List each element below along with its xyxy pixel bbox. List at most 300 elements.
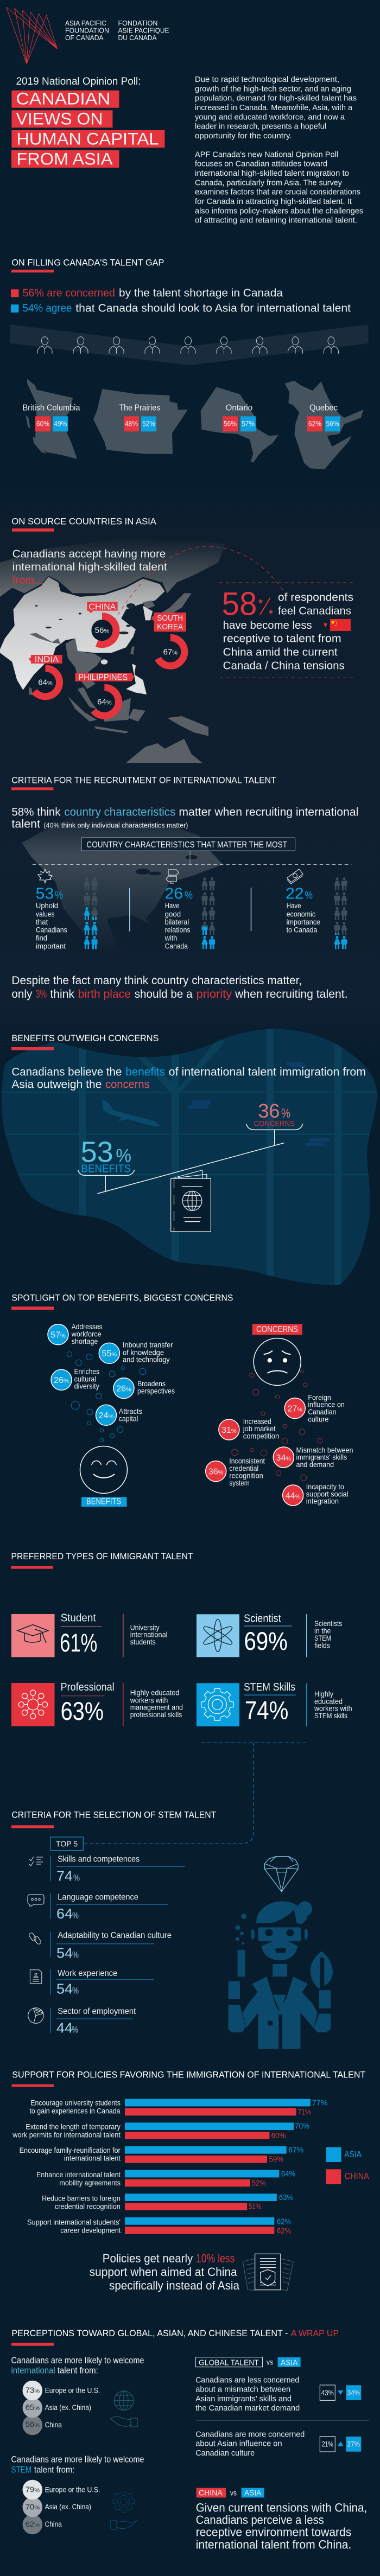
panel: welcoming international talent: talent from: (58, 2366, 98, 2376)
concern labels: support social (306, 1489, 349, 1498)
province percentage boxes: 60% (36, 419, 49, 428)
icon: graduation cap (17, 1624, 48, 1643)
policy labels: Extend the length of temporary (26, 2122, 121, 2131)
column: 53% uphold values: 53 (36, 885, 54, 903)
stacked circles (23, 2480, 42, 2534)
concern labels: job market (243, 1424, 276, 1433)
map: British Columbia (26, 379, 77, 459)
dashed connector from STEM skills to top 5 (84, 1743, 306, 1844)
policy labels: Reduce barriers to foreign (42, 2195, 121, 2203)
key stats: concerned and agree: 54% agree (23, 303, 72, 315)
column: 22% economic importance: importance (287, 918, 320, 926)
concern labels: Inconsistent (229, 1457, 265, 1465)
panel: welcoming STEM talent: STEM (11, 2465, 31, 2475)
blob background with airport window (0, 1025, 380, 1297)
policy labels: Encourage family-reunification for (20, 2146, 121, 2154)
benefit labels: diversity (74, 1382, 99, 1391)
tile: Scientist 69%: in the (314, 1627, 331, 1635)
row: adaptability to Canadian culture: % (72, 1949, 79, 1960)
tile: STEM Skills 74%: STEM skills (314, 1711, 347, 1720)
birth place statement: only (11, 988, 33, 1000)
logo: Asia Pacific Foundation: DU CANADA (118, 34, 157, 42)
comparison 21 to 27 percent: 21% (322, 2440, 333, 2448)
recruitment statement: talent (11, 818, 40, 830)
concerns tag: CONCERNS (256, 1325, 298, 1334)
panel: welcoming international talent: Canadians are more likely to welcome (11, 2356, 144, 2365)
benefit labels: cultural (74, 1374, 96, 1383)
panel: China vs Asia: Canadians perceive a less (196, 2513, 324, 2527)
heading: perceptions wrap up: PERCEPTIONS TOWARD GLOBAL, ASIAN, AND CHINESE TALENT - (11, 2328, 288, 2338)
column: 26% bilateral relations: 26 (165, 885, 183, 903)
comparison 21 to 27 percent: 27% (347, 2440, 360, 2448)
title block: HUMAN CAPITAL (16, 129, 159, 148)
policy labels: career development (60, 2226, 121, 2234)
53% benefits: BENEFITS (81, 1163, 131, 1175)
Canadians accept text: from... (12, 575, 43, 586)
stacked circles: 56% (26, 2420, 40, 2430)
key stats: concerned and agree (11, 288, 351, 315)
heading: support for policies (12, 2069, 365, 2087)
column: 53% uphold values: that (36, 918, 48, 926)
panel: global talent vs Asia: about a mismatch between (195, 2385, 290, 2394)
heading: criteria for recruitment (11, 775, 276, 790)
benefit labels: Inbound transfer (123, 1341, 173, 1349)
donut: Philippines 64%: 64% (97, 697, 112, 706)
icon: gear and hand (110, 2491, 137, 2529)
heading: perceptions wrap up (11, 2328, 339, 2346)
concern labels: immigrants' skills (296, 1453, 347, 1462)
policy labels: credential recognition (55, 2203, 121, 2211)
logo: Asia Pacific Foundation (7, 7, 169, 63)
tile: Scientist 69%: 69% (244, 1627, 288, 1655)
tile: Student 61%: international (130, 1630, 167, 1639)
panel: China vs Asia: international talent from China. (196, 2537, 351, 2551)
row: sector of employment: % (72, 2025, 78, 2035)
column: 53% uphold values: values (36, 910, 55, 918)
column: 26% bilateral relations: Canada (165, 942, 188, 951)
icon: policy documents with shield (243, 2254, 293, 2291)
53% benefits: 53 (81, 1136, 113, 1169)
panel: welcoming STEM talent: Asia (ex. China) (45, 2502, 91, 2511)
column: 53% uphold values: important (36, 942, 66, 951)
concerns bubbles: 34% (276, 1453, 291, 1463)
tile: Scientist 69% (197, 1612, 342, 1657)
recruitment statement: matter when recruiting international (179, 806, 358, 818)
map of Asia (0, 539, 225, 763)
stacked circles: 79% (26, 2485, 40, 2495)
row: language competence: 64 (56, 1905, 73, 1922)
intro paragraphs: population, demand for high-skilled talent has (195, 94, 357, 103)
tile: Scientist 69%: STEM (314, 1634, 331, 1642)
bar values: 52% (252, 2178, 266, 2188)
column: 53% uphold values: Uphold (36, 902, 58, 910)
title block: CANADIAN (16, 88, 111, 108)
panel: welcoming STEM talent: Europe or the U.S. (45, 2485, 100, 2494)
Canadians accept text: Canadians accept having more (12, 548, 166, 560)
panel: China vs Asia: vs (230, 2488, 237, 2497)
province percentage boxes: 48% (125, 419, 138, 428)
heading: benefits outweigh concerns (11, 1033, 159, 1050)
panel: China vs Asia: CHINA (199, 2488, 223, 2497)
plane silhouette (102, 1100, 160, 1127)
beam and brackets (78, 1124, 303, 1194)
heading: criteria for selection of STEM talent: CRITERIA FOR THE SELECTION OF STEM TALENT (11, 1810, 216, 1820)
donut: Philippines 64%: PHILIPPINES (78, 673, 128, 683)
intro paragraphs: of attracting and retaining international talent. (195, 216, 357, 225)
tile: Student 61%: students (130, 1637, 156, 1646)
bar values: 71% (297, 2108, 311, 2117)
row: language competence: % (72, 1910, 79, 1921)
icon: passport (171, 1170, 211, 1232)
intro paragraphs: increased in Canada. Meanwhile, Asia, with a (195, 103, 353, 112)
policy labels: international talent (64, 2154, 121, 2163)
icon: globe and hand (111, 2391, 137, 2427)
concern labels: and demand (296, 1460, 334, 1469)
panel: global talent vs Asia: Asian immigrants' skills and (195, 2394, 292, 2403)
heading: preferred types of immigrant talent: PREFERRED TYPES OF IMMIGRANT TALENT (11, 1551, 193, 1561)
policy labels: to gain experiences in Canada (29, 2107, 121, 2115)
seesaw: 53% benefits versus 36% concerns (78, 1100, 303, 1232)
intro paragraphs: opportunity for the country. (195, 131, 292, 141)
benefits bubbles: 24% (99, 1411, 114, 1420)
intro paragraphs (195, 75, 363, 225)
panel: China vs Asia: ASIA (244, 2488, 261, 2497)
36% concerns (254, 1100, 295, 1127)
intro paragraphs: growth of the high-tech sector, and an aging (195, 84, 351, 93)
province percentage boxes: 57% (242, 419, 255, 428)
donut: China 56% (87, 602, 118, 645)
callout: policies get nearly 10% less support: 10% less (196, 2252, 235, 2265)
comparison 43 to 34 percent: 34% (347, 2389, 360, 2397)
bar chart: policy support Asia vs China (12, 2099, 369, 2235)
row: skills and competences: 74 (56, 1868, 73, 1884)
donut: South Korea 67%: SOUTH (157, 614, 183, 623)
birth place statement (11, 974, 348, 1000)
icon: happy face (80, 1446, 127, 1517)
tile: Student 61% (11, 1612, 167, 1657)
benefit labels: and technology (123, 1355, 170, 1364)
province percentage boxes: 52% (142, 419, 155, 428)
column: 22% economic importance (286, 869, 347, 949)
intro paragraphs: focuses on Canadian attitudes toward (195, 160, 327, 169)
concerns bubbles: 31% (221, 1426, 237, 1435)
column: 53% uphold values: find (36, 934, 47, 942)
tile: Professional 63% (11, 1681, 183, 1726)
tags: ASIA (281, 2358, 297, 2367)
concerns bubbles: 36% (208, 1467, 224, 1477)
bar values: 62% (277, 2217, 291, 2227)
title block: 2019 National Opinion Poll: (16, 75, 141, 87)
column: 22% economic importance: 22 (286, 885, 304, 903)
icon: stack of money (287, 869, 303, 884)
icon: sad face (254, 1338, 301, 1386)
Canadians accept text (12, 548, 167, 586)
callout: policies get nearly 10% less support (90, 2252, 240, 2292)
tile: STEM Skills 74%: workers with (314, 1704, 352, 1713)
heading: spotlight on benefits and concerns: SPOTLIGHT ON TOP BENEFITS, BIGGEST CONCERNS (11, 1292, 233, 1303)
map of North America (22, 815, 223, 955)
panel: welcoming STEM talent: Canadians are more likely to welcome (11, 2455, 144, 2465)
callout: 58% of respondents: of respondents (278, 592, 353, 604)
tile: STEM Skills 74% (197, 1681, 352, 1726)
legend (326, 2147, 369, 2184)
pictogram 26 percent (201, 877, 216, 949)
row: adaptability to Canadian culture (28, 1931, 172, 1961)
tile: Student 61%: 61% (60, 1628, 97, 1657)
benefit labels: workforce (71, 1330, 102, 1338)
divider lines between columns (130, 888, 251, 932)
panel: welcoming STEM talent (11, 2455, 144, 2534)
benefits bubbles: 55% (102, 1349, 117, 1359)
concern labels: Incapacity to (306, 1482, 344, 1491)
concern labels: Foreign (308, 1393, 331, 1401)
tile: Scientist 69%: Scientist (244, 1612, 281, 1624)
provincial maps and percentages (23, 379, 364, 469)
province percentage boxes: 49% (54, 419, 67, 428)
callout: policies get nearly 10% less support: support when aimed at China (90, 2265, 237, 2279)
donut: South Korea 67% (151, 613, 186, 666)
recruitment statement: 58% think (11, 806, 61, 818)
benefits statement: concerns (105, 1078, 150, 1091)
column: 53% uphold values (36, 869, 98, 951)
concerns bubbles: 44% (286, 1491, 301, 1501)
icon: signpost (166, 870, 179, 883)
panel: China vs Asia: receptive environment towards (196, 2526, 351, 2539)
intro paragraphs: international high-skilled talent migration to (195, 169, 349, 178)
panel: welcoming STEM talent: talent from: (34, 2465, 75, 2475)
tags: GLOBAL TALENT (199, 2358, 259, 2367)
column: 26% bilateral relations: good (165, 910, 181, 918)
legend: ASIA (344, 2149, 362, 2159)
tile: Professional 63%: Professional (61, 1681, 115, 1693)
36% concerns: CONCERNS (254, 1119, 295, 1127)
heading: preferred types of immigrant talent (11, 1551, 193, 1569)
recruitment statement (11, 806, 358, 830)
tile: Scientist 69%: fields (314, 1641, 330, 1649)
policy labels: Enhance international talent (36, 2171, 121, 2179)
comparison 43 to 34 percent: 43% (321, 2389, 334, 2397)
concern labels: Increased (243, 1417, 271, 1426)
heading: on source countries in Asia: ON SOURCE COUNTRIES IN ASIA (11, 517, 157, 527)
tile: STEM Skills 74%: educated (314, 1697, 343, 1705)
bar values: 67% (288, 2146, 303, 2155)
logo: Asia Pacific Foundation: FONDATION (118, 20, 157, 27)
intro paragraphs: Due to rapid technological development, (195, 75, 339, 84)
map: Prairies (93, 389, 188, 454)
donut: China 56%: 56% (95, 626, 109, 635)
benefit labels: shortage (72, 1337, 98, 1346)
36% concerns: % (281, 1106, 290, 1121)
panel: global talent vs Asia (195, 2357, 369, 2458)
tile: Scientist 69%: Scientists (314, 1619, 342, 1628)
tile: Professional 63%: Highly educated (130, 1688, 179, 1697)
concerns bubbles (206, 1324, 353, 1506)
policy labels: Encourage university students (30, 2099, 121, 2107)
top 5 tag: TOP 5 (56, 1839, 78, 1848)
row: work experience: Work experience (58, 1969, 117, 1978)
bar values (249, 2099, 328, 2235)
recruitment statement: country characteristics (64, 806, 175, 818)
row: language competence (28, 1893, 168, 1922)
icon: gear (201, 1688, 233, 1720)
top 5 tag (50, 1837, 83, 1851)
donut: South Korea 67%: KOREA (157, 622, 183, 632)
stacked circles: 65% (26, 2403, 40, 2412)
column: 26% bilateral relations: % (185, 890, 193, 902)
callout: 58% of respondents: 58 (221, 585, 257, 622)
Canadians accept text: international high-skilled talent (12, 562, 167, 573)
benefits statement: of international talent immigration from (169, 1066, 366, 1078)
row: skills and competences: Skills and competences (58, 1855, 140, 1864)
Asia bars (125, 2099, 311, 2225)
recruitment statement: (40% think only individual characteristics matter) (43, 821, 188, 829)
benefit labels: perspectives (137, 1386, 175, 1395)
pictogram 22 percent (334, 877, 347, 949)
heading: on source countries in Asia (11, 517, 157, 532)
benefits statement: Canadians believe the (11, 1066, 122, 1078)
heading: criteria for recruitment: CRITERIA FOR THE RECRUITMENT OF INTERNATIONAL TALENT (11, 775, 276, 785)
column: 22% economic importance: Have (287, 902, 301, 910)
benefits bubbles: 57% (50, 1330, 66, 1340)
column: 22% economic importance: economic (287, 910, 315, 918)
province percentage boxes (35, 416, 340, 431)
tile: STEM Skills 74%: 74% (245, 1695, 288, 1724)
benefit labels: Broadens (137, 1379, 166, 1388)
small bubbles (67, 1352, 146, 1442)
intro paragraphs: also informs policy-makers about the challenges (195, 206, 363, 215)
row: adaptability to Canadian culture: 54 (56, 1944, 73, 1961)
concern labels: recognition (229, 1471, 263, 1480)
bar values: 60% (271, 2131, 286, 2140)
tags (195, 2357, 301, 2367)
concern labels: Mismatch between (296, 1445, 353, 1454)
panel: welcoming international talent: international (11, 2366, 55, 2376)
bar values: 64% (281, 2169, 295, 2178)
benefits statement: Asia outweigh the (11, 1078, 102, 1091)
panel: global talent vs Asia: Canadians are more concerned (195, 2430, 305, 2439)
birth place statement: should be a (135, 988, 193, 1000)
intro paragraphs: for Canada in attracting high-skilled talent. It (195, 197, 352, 206)
China bars (125, 2108, 296, 2234)
policy labels (12, 2099, 121, 2234)
legend: CHINA (345, 2171, 369, 2182)
dashed arc from China to Canada (110, 546, 286, 627)
row: sector of employment (28, 2007, 136, 2036)
province labels: British Columbia (23, 404, 80, 413)
tags: vs (267, 2358, 273, 2367)
icon: network hub (18, 1690, 48, 1719)
bar values: 62% (277, 2226, 291, 2235)
tile: Student 61%: Student (61, 1612, 96, 1624)
panel: China vs Asia: Given current tensions with China, (196, 2501, 367, 2514)
donut: South Korea 67%: 67% (163, 647, 178, 656)
logo: Asia Pacific Foundation: ASIE PACIFIQUE (118, 27, 169, 35)
column: 22% economic importance: to Canada (287, 926, 318, 934)
province labels (23, 404, 338, 413)
row: sector of employment: Sector of employment (58, 2007, 136, 2016)
benefit labels (71, 1322, 175, 1423)
concern labels: system (229, 1478, 250, 1487)
tile: Professional 63%: management and (130, 1703, 183, 1712)
callout: 58% of respondents: Canada / China tensions (223, 660, 345, 672)
birth place statement: when recruiting talent. (235, 988, 348, 1000)
logo: Asia Pacific Foundation: ASIA PACIFIC (65, 20, 106, 27)
province labels: Ontario (226, 404, 252, 413)
row: skills and competences (29, 1855, 185, 1884)
callout: 58% of respondents: China amid the current (223, 646, 338, 658)
donut: India 64%: 64% (38, 678, 53, 687)
tile: Student 61%: University (130, 1623, 160, 1631)
callout: 58% of respondents (219, 583, 355, 678)
column: 26% bilateral relations: with (164, 934, 177, 942)
key stats: concerned and agree: that Canada should look to Asia for international talent (75, 303, 351, 315)
donut: India 64%: INDIA (35, 655, 59, 665)
panel: global talent vs Asia: the Canadian market demand (195, 2403, 300, 2413)
stacked circles: 73% (26, 2386, 40, 2395)
bar values: 77% (312, 2099, 328, 2108)
tile: Professional 63%: 63% (61, 1697, 104, 1725)
map: Quebec (284, 381, 364, 469)
row: adaptability to Canadian culture: Adaptability to Canadian culture (58, 1931, 172, 1940)
icon: maple leaf (38, 869, 52, 883)
53% benefits (81, 1136, 131, 1175)
heading: support for policies: SUPPORT FOR POLICIES FAVORING THE IMMIGRATION OF INTERNATIONAL TALENT (12, 2069, 365, 2080)
benefit labels: capital (119, 1414, 138, 1423)
benefit labels: Addresses (72, 1322, 103, 1331)
36% concerns: 36 (258, 1100, 280, 1122)
column: 22% economic importance: % (305, 890, 313, 902)
benefits bubbles: 26% (116, 1385, 131, 1393)
small bubbles (232, 1370, 322, 1481)
intro paragraphs: young and educated workforce, and now a (195, 112, 345, 122)
callout: policies get nearly 10% less support: Policies get nearly (103, 2252, 193, 2265)
stacked circles (23, 2381, 42, 2435)
chevron banner with workers (10, 324, 368, 365)
row: skills and competences: % (73, 1873, 80, 1883)
stacked circles: 70% (26, 2503, 40, 2512)
birth place statement: think (50, 988, 75, 1000)
intro paragraphs: Canada, particularly from Asia. The survey (195, 178, 342, 187)
bar values: 63% (279, 2193, 293, 2202)
callout: policies get nearly 10% less support: specifically instead of Asia (109, 2279, 240, 2292)
tile: STEM Skills 74%: Highly (314, 1689, 333, 1698)
benefits statement: benefits (125, 1066, 165, 1078)
policy labels: mobility agreements (59, 2179, 121, 2187)
donut: India 64% (29, 655, 62, 697)
callout: 58% of respondents: ★ (268, 608, 274, 616)
heading: benefits outweigh concerns: BENEFITS OUTWEIGH CONCERNS (11, 1033, 159, 1043)
donut: Philippines 64% (75, 673, 134, 716)
title block: FROM ASIA (16, 149, 112, 168)
bar values: 59% (269, 2155, 283, 2164)
heading: on filling Canada's talent gap (11, 257, 164, 272)
concern labels: Canadian (308, 1407, 336, 1416)
panel: welcoming international talent (11, 2356, 144, 2435)
row: work experience: % (72, 1985, 79, 1995)
tile: Professional 63%: professional skills (130, 1710, 182, 1719)
panel: welcoming international talent: Europe or the U.S. (45, 2386, 100, 2394)
intro paragraphs: APF Canada's new National Opinion Poll (195, 150, 338, 159)
policy labels: work permits for international talent (12, 2131, 121, 2139)
callout: 58% of respondents: have become less (223, 620, 312, 632)
panel: welcoming STEM talent: China (45, 2520, 62, 2528)
birth place statement: birth place (78, 988, 131, 1000)
row: language competence: Language competence (58, 1893, 138, 1902)
column: 26% bilateral relations: relations (165, 926, 191, 934)
callout: 58% of respondents: receptive to talent from (223, 633, 341, 645)
column: 53% uphold values: % (55, 890, 63, 902)
province percentage boxes: 62% (308, 419, 321, 428)
